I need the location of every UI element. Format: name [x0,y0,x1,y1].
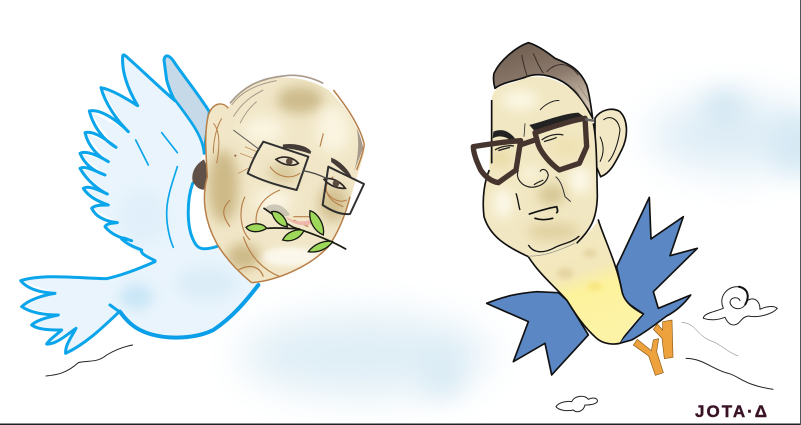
left blue wing [487,292,588,375]
signature: JOTA·Δ [695,402,767,421]
olive branch [246,208,346,252]
older man's head [204,75,365,283]
large swirl cloud [703,287,777,325]
hair [493,43,593,118]
neck and yellow breast [528,220,643,344]
dove with older man's head [21,55,365,376]
orange legs [633,320,673,375]
thick dark glasses [473,118,594,183]
flight lines [682,322,773,389]
younger man's head [483,77,597,257]
clouds and flight lines on the right [556,287,777,412]
back hair tuft [192,159,210,190]
younger man's ear [595,109,626,177]
small cloud [556,396,597,412]
right blue wing [617,197,697,344]
older man's eyes and eyebrows [270,145,352,201]
younger man's brows, eyes, nose and mouth [493,101,585,256]
dove body and wing [21,55,258,353]
background clouds [240,90,801,398]
back wing [164,56,209,153]
flight line under dove [46,345,133,376]
blue bird with younger man's head [473,43,697,375]
older man's glasses [233,130,364,214]
